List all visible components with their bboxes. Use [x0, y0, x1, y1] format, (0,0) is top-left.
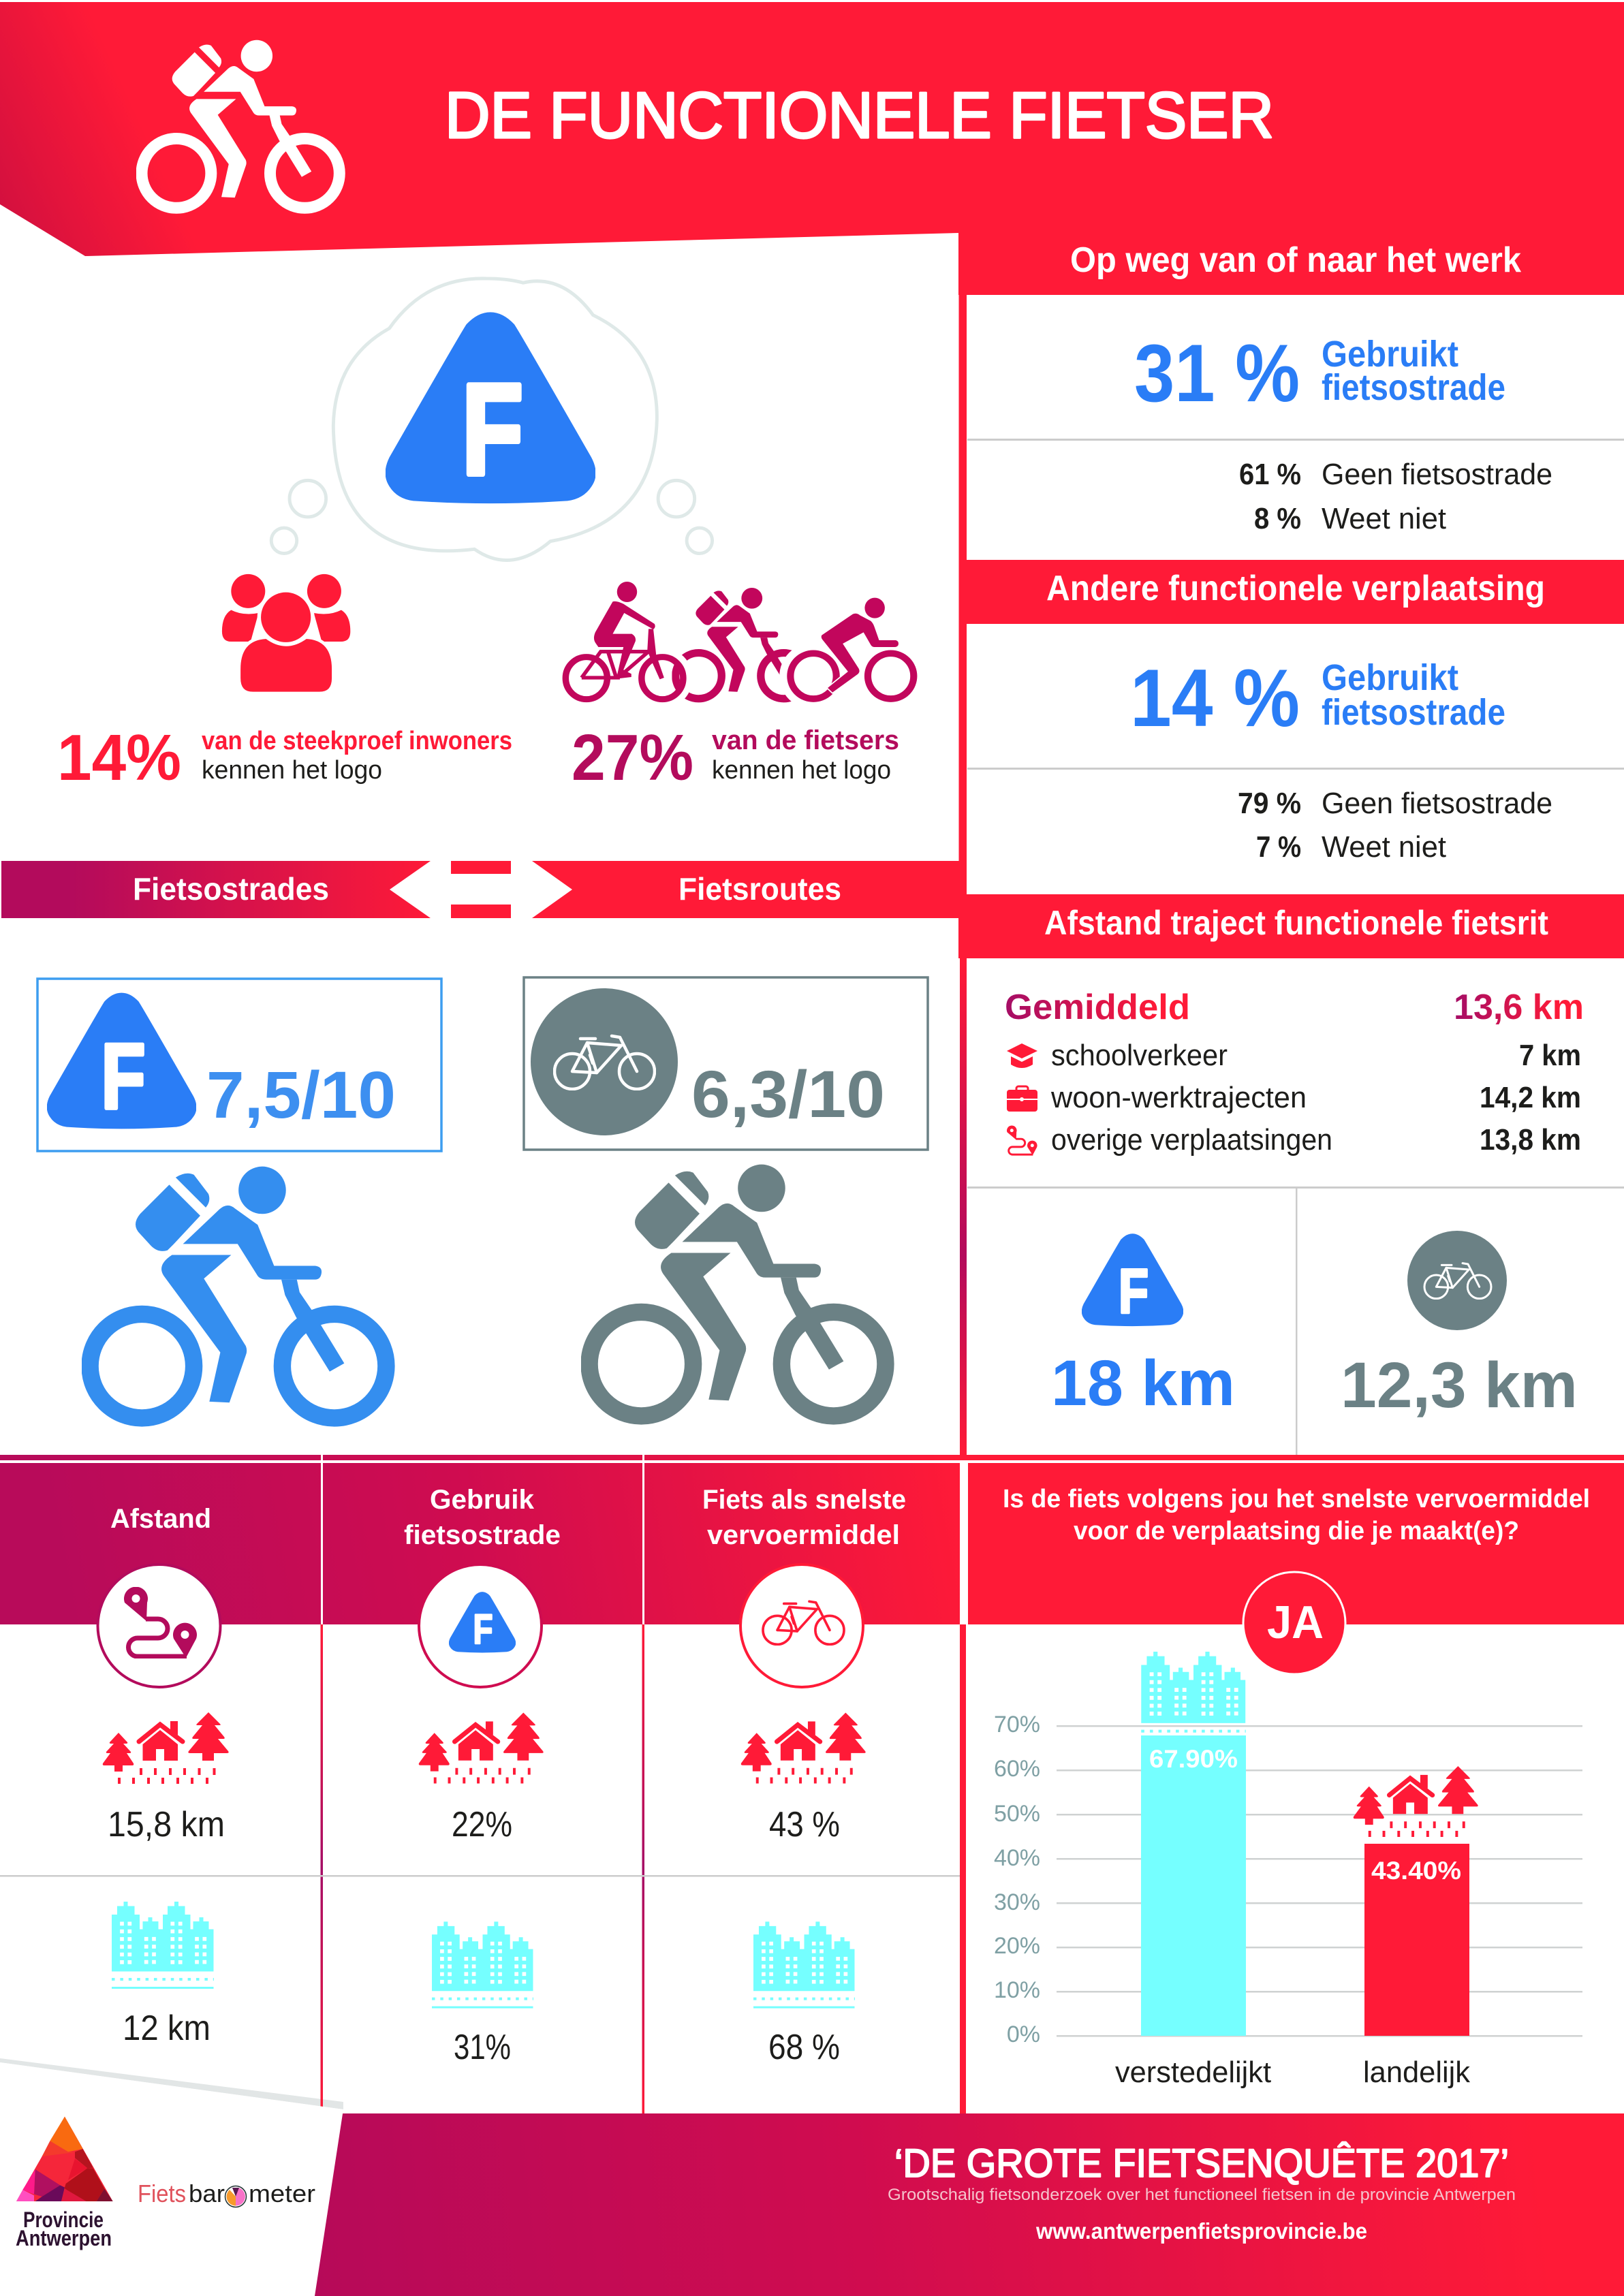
- footer title: ‘DE GROTE FIETSENQUÊTE 2017’: [894, 2141, 1509, 2186]
- icon: F badge: F: [473, 1606, 493, 1652]
- icon: graduation cap: [1007, 1043, 1037, 1068]
- heading: [702, 1485, 906, 1550]
- category labels: [1115, 2056, 1471, 2089]
- heading: Op weg van of naar het werk: [1070, 240, 1521, 280]
- footer subtitle: Grootschalig fietsonderzoek over het functioneel fietsen in de provincie Antwerpen: [888, 2186, 1516, 2204]
- row: woon-werktrajecten: woon-werktrajecten: [1050, 1081, 1307, 1114]
- stat: inhabitants 14%: 14%: [57, 721, 181, 794]
- icon: large F triangle: [386, 312, 596, 503]
- badge: JA: JA: [1267, 1597, 1324, 1648]
- icon: route badge: [98, 1564, 221, 1687]
- label: gebruikt fietsostrade: [1322, 334, 1505, 408]
- category labels: verstedelijkt: [1115, 2056, 1271, 2089]
- footer banner: [0, 2113, 1624, 2296]
- score box: fietsostrades: F: [101, 1024, 146, 1128]
- stat: inhabitants 14%: van de steekproef inwoners: [202, 727, 512, 755]
- row: schoolverkeer: 7 km: [1519, 1039, 1581, 1072]
- heading: fietsostrade: [404, 1520, 561, 1550]
- category labels: landelijk: [1363, 2056, 1471, 2089]
- icon: city: [432, 1921, 533, 2009]
- question text: voor de verplaatsing die je maakt(e)?: [1074, 1517, 1519, 1545]
- stat: 12,3 km on fietsroute: 12,3 km: [1341, 1349, 1578, 1421]
- row: overige verplaatsingen: 13,8 km: [1480, 1123, 1581, 1157]
- badge: JA: [1243, 1572, 1345, 1674]
- column: afstand: [98, 1504, 229, 2048]
- stat: 12,3 km on fietsroute: [1341, 1231, 1578, 1421]
- logo: provincie antwerpen triangle: [16, 2117, 113, 2201]
- value: urban fastest: 68 %: [768, 2028, 840, 2067]
- icon: city: [112, 1902, 214, 1989]
- icon: large F triangle: F: [462, 358, 523, 502]
- value: urban use: 31%: [454, 2028, 511, 2067]
- row: woon-werktrajecten: 14,2 km: [1480, 1081, 1581, 1114]
- other answers: 79 %: [1238, 787, 1301, 820]
- heading: Afstand: [110, 1504, 211, 1534]
- score box: fietsroutes: 6,3/10: [691, 1057, 885, 1131]
- bar: verstedelijkt: 67.90%: [1149, 1745, 1238, 1773]
- row: schoolverkeer: [1051, 1039, 1581, 1072]
- other answers: Weet niet: [1322, 830, 1446, 864]
- other answers: 61 %: [1239, 458, 1301, 491]
- stat: inhabitants 14%: [57, 721, 512, 794]
- panel: afstand traject functionele fietsrit: [958, 894, 1624, 1455]
- label: gebruikt fietsostrade: [1322, 657, 1505, 733]
- middle rider with backpack: [676, 588, 807, 699]
- value: rural fastest: 43 %: [769, 1805, 840, 1844]
- logo card: [0, 2062, 343, 2296]
- heading: Gebruik: [430, 1485, 535, 1515]
- average distance row: [1005, 988, 1584, 1027]
- heading: Afstand traject functionele fietsrit: [1044, 904, 1548, 942]
- row: overige verplaatsingen: overige verplaatsingen: [1051, 1123, 1332, 1157]
- axis labels: 30%: [994, 1889, 1040, 1915]
- band: fietsostrades equals fietsroutes: Fietsroutes: [678, 871, 841, 907]
- score box: fietsostrades: [37, 979, 441, 1151]
- row: schoolverkeer: schoolverkeer: [1051, 1039, 1228, 1072]
- icon: F badge: [419, 1564, 542, 1687]
- icon: small route: [1007, 1125, 1037, 1155]
- panel: op weg van of naar het werk: [967, 240, 1624, 535]
- other answers: 7 %: [1256, 830, 1301, 864]
- column: gebruik fietsostrade: [404, 1485, 561, 2067]
- icon: rural: [103, 1712, 229, 1784]
- value: rural distance: 15,8 km: [108, 1805, 225, 1844]
- label: gebruikt fietsostrade: fietsostrade: [1322, 367, 1505, 408]
- heading: Andere functionele verplaatsing: [1046, 569, 1545, 608]
- logo text: provincie antwerpen: Provincie: [23, 2207, 104, 2232]
- stat: 14 percent: 14 %: [1130, 652, 1300, 744]
- logo: fietsbarometer: [138, 2180, 315, 2207]
- other answers: Geen fietsostrade: [1322, 458, 1552, 491]
- icon: briefcase: [1007, 1086, 1037, 1112]
- axis labels: 40%: [994, 1845, 1040, 1871]
- row: overige verplaatsingen: [1051, 1123, 1581, 1157]
- icon: rural: [741, 1713, 866, 1783]
- stat: 18 km on fietsostrade: [1051, 1233, 1235, 1419]
- stat: 18 km on fietsostrade: 18 km: [1051, 1347, 1235, 1419]
- bar: landelijk: 43.40%: [1371, 1857, 1461, 1885]
- icon: grey cyclist: [589, 1165, 886, 1416]
- icon: group of people: [222, 574, 350, 693]
- other answers: [1239, 458, 1552, 535]
- label: gebruikt fietsostrade: Gebruikt: [1322, 657, 1458, 698]
- logo: fietsbarometer: meter: [249, 2180, 315, 2207]
- bar: verstedelijkt: [1141, 1652, 1246, 2036]
- icon: city: [753, 1921, 855, 2009]
- title: DE FUNCTIONELE FIETSER: [445, 79, 1274, 152]
- average distance row: Gemiddeld: [1005, 988, 1190, 1027]
- bar: landelijk: [1354, 1766, 1478, 2036]
- score box: fietsroutes: [524, 977, 928, 1150]
- heading: vervoermiddel: [707, 1520, 900, 1550]
- axis labels: 20%: [994, 1933, 1040, 1959]
- icon: three cyclists: [565, 582, 914, 703]
- band: fietsostrades equals fietsroutes: [1, 861, 967, 918]
- stat: cyclists 27%: van de fietsers: [712, 725, 899, 755]
- column: fiets als snelste vervoermiddel: [702, 1485, 906, 2067]
- header banner: [0, 2, 1624, 295]
- stat: 31 percent: 31 %: [1134, 328, 1300, 419]
- stat: 18 km on fietsostrade: F: [1119, 1257, 1149, 1326]
- label: gebruikt fietsostrade: fietsostrade: [1322, 692, 1505, 733]
- stat: cyclists 27%: kennen het logo: [712, 756, 891, 785]
- value: rural use: 22%: [452, 1805, 512, 1844]
- axis labels: 50%: [994, 1801, 1040, 1827]
- value: urban distance: 12 km: [123, 2009, 210, 2048]
- logo: fietsbarometer: Fiets: [138, 2180, 186, 2207]
- axis labels: 70%: [994, 1712, 1040, 1737]
- other answers: Geen fietsostrade: [1322, 787, 1552, 820]
- score box: fietsostrades: 7,5/10: [206, 1058, 396, 1132]
- bar chart: [994, 1652, 1582, 2089]
- logo text: provincie antwerpen: [16, 2207, 112, 2250]
- footer url: www.antwerpenfietsprovincie.be: [1035, 2218, 1367, 2244]
- other answers: 8 %: [1254, 502, 1301, 535]
- right column dividers: [959, 295, 967, 2113]
- icon: rural: [419, 1713, 544, 1783]
- panel: comparison table: [0, 1455, 960, 2113]
- heading: [404, 1485, 561, 1550]
- axis labels: 0%: [1007, 2022, 1040, 2047]
- stat: inhabitants 14%: kennen het logo: [202, 756, 382, 785]
- axis labels: 60%: [994, 1756, 1040, 1782]
- icon: header cyclist: [142, 40, 339, 208]
- stat: cyclists 27%: 27%: [572, 721, 693, 794]
- heading: Fiets als snelste: [702, 1485, 906, 1515]
- row: woon-werktrajecten: [1050, 1081, 1581, 1114]
- logo text: provincie antwerpen: Antwerpen: [16, 2226, 112, 2250]
- icon: bicycle badge: [740, 1564, 863, 1687]
- question text: [1003, 1485, 1590, 1545]
- panel: snelste vervoermiddel question: [960, 1455, 1624, 1674]
- axis labels: 10%: [994, 1977, 1040, 2003]
- logo: fietsbarometer: bar: [189, 2180, 225, 2207]
- grid lines: [1057, 1725, 1582, 2036]
- other answers: Weet niet: [1322, 502, 1446, 535]
- icon: blue cyclist: [90, 1167, 386, 1418]
- band: fietsostrades equals fietsroutes: Fietsostrades: [133, 871, 329, 907]
- other answers: [1238, 787, 1552, 864]
- thought bubble with F logo: [271, 279, 713, 561]
- panel: andere functionele verplaatsing: [967, 560, 1624, 864]
- axis labels: [994, 1712, 1040, 2047]
- label: gebruikt fietsostrade: Gebruikt: [1322, 334, 1458, 375]
- average distance row: 13,6 km: [1454, 988, 1584, 1027]
- question text: Is de fiets volgens jou het snelste vervoermiddel: [1003, 1485, 1590, 1513]
- stat: cyclists 27%: [572, 721, 899, 794]
